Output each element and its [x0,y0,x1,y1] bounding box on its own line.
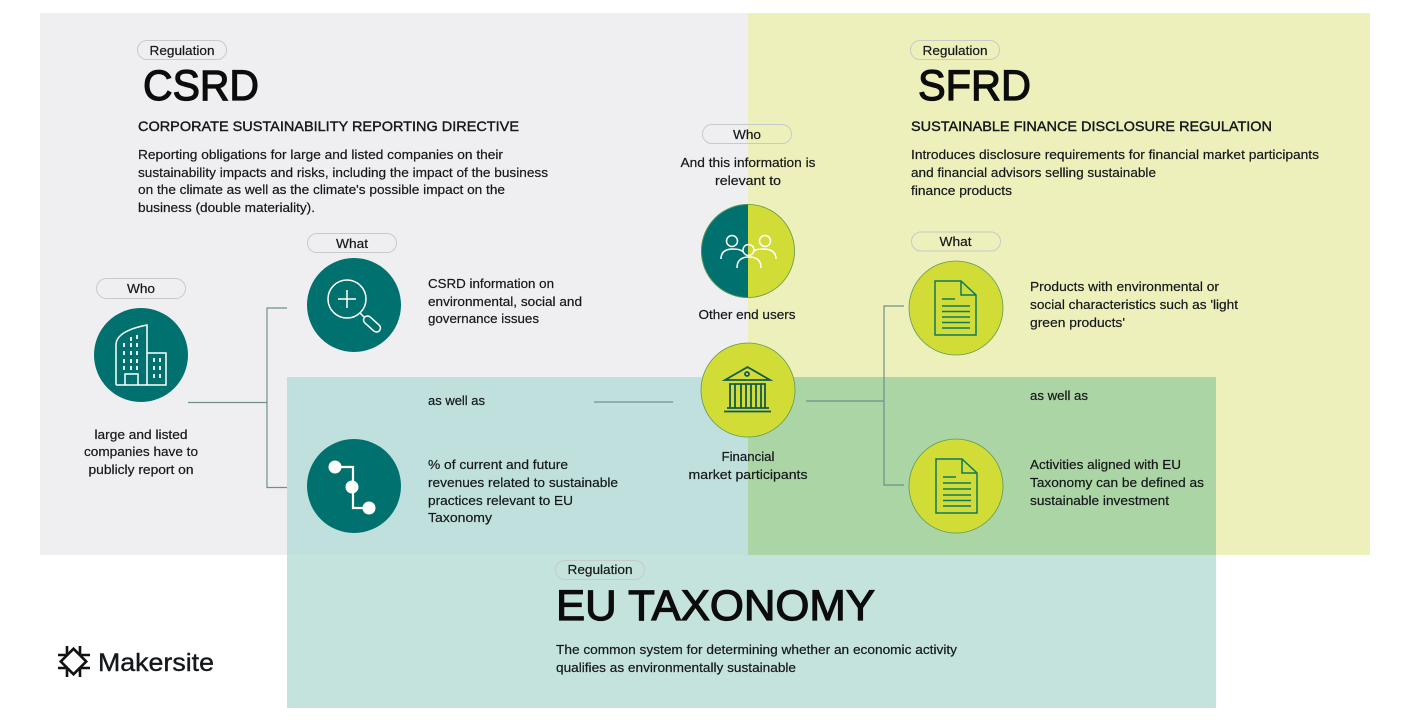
text: CSRD description: Reporting obligations for large and listed companies on their [138,147,504,162]
pill: Who [702,124,792,144]
pill: Regulation SFRD [910,40,1000,60]
pill: Regulation CSRD: Regulation [150,43,214,58]
pill: What [912,232,1000,251]
text: relevant to [680,155,816,188]
subheading: CSRD full name: CORPORATE SUSTAINABILITY REPORTING DIRECTIVE [138,118,519,134]
pill: Regulation SFRD: Regulation [922,43,988,58]
text: SFRD description: finance products [911,183,1013,198]
pill: What [308,234,396,252]
text: financial market participants: market participants [688,467,808,482]
group: SFRD what [909,232,1238,533]
text: activities aligned [1030,457,1205,508]
text: activities aligned: Activities aligned with EU [1030,457,1181,472]
text: CSRD description: sustainability impacts and risks, including the impact of the business [138,165,549,180]
icon: Makersite mark [58,646,90,677]
text: large and listed companies: companies have to [84,444,198,459]
text: large and listed companies [84,427,198,477]
pill: What: What [336,236,368,251]
text: CSRD information: governance issues [428,311,540,326]
text: relevant to: And this information is [680,155,816,170]
text: EU Taxonomy description [556,642,958,675]
text: SFRD description: and financial advisors selling sustainable [911,165,1156,180]
heading: CSRD: CSRD [143,62,259,110]
text: activities aligned: Taxonomy can be defined as [1030,475,1205,490]
panel: SFRD heading block [910,40,1320,198]
group: CSRD what [307,234,618,533]
icon: magnifying glass [307,258,401,352]
text: products with characteristics: social characteristics such as 'light [1030,297,1238,312]
overlap: CSRD and EU Taxonomy [287,377,748,555]
icon: pathway nodes [307,439,401,533]
text: percentage of revenues [428,457,618,525]
text: large and listed companies: publicly report on [88,462,194,477]
text: other end users: Other end users [698,307,796,322]
connector: financial market participants to SFRD what [806,306,904,485]
group: centre who [680,124,816,482]
text: CSRD information: environmental, social and [428,294,582,309]
text: large and listed companies: large and listed [94,427,188,442]
text: products with characteristics: Products with environmental or [1030,279,1220,294]
pill: Who [96,278,186,298]
text: CSRD information: CSRD information on [428,276,554,291]
text: as well as (SFRD): as well as [1030,388,1089,403]
text: products with characteristics [1030,279,1238,330]
panel: SFRD background [748,13,1370,555]
pill: Who: Who [733,127,761,142]
pill: Regulation EU Taxonomy: Regulation [568,562,632,577]
panel: CSRD heading block [138,40,549,215]
subheading: SFRD full name: SUSTAINABLE FINANCE DISCLOSURE REGULATION [911,118,1272,134]
group: CSRD who [84,278,198,477]
text: SFRD description: Introduces disclosure requirements for financial market participants [911,147,1320,162]
text: products with characteristics: green products' [1030,315,1125,330]
icon: other end users [701,204,795,298]
overlap: SFRD and EU Taxonomy [748,377,1216,555]
text: SFRD description [911,147,1320,198]
text: percentage of revenues: practices relevant to EU [428,493,573,508]
connector: CSRD who to what [188,308,287,488]
icon: document [909,439,1003,533]
panel: EU Taxonomy background [287,377,1216,708]
heading: SFRD: SFRD [918,62,1031,110]
text: CSRD description [138,147,549,215]
pill: Regulation CSRD [138,40,226,60]
text: financial market participants: Financial [722,449,775,464]
connector: as well as to financial market participants [594,401,673,403]
logo: Makersite [58,646,214,677]
panel: EU Taxonomy heading block [556,560,958,675]
panel: CSRD background [40,13,748,555]
text: CSRD information [428,276,582,326]
icon: document [909,261,1003,355]
text: percentage of revenues: Taxonomy [428,510,493,525]
text: CSRD description: business (double materiality). [138,200,315,215]
text: relevant to: relevant to [715,173,781,188]
icon: office buildings [94,308,188,402]
text: EU Taxonomy description: qualifies as environmentally sustainable [556,660,796,675]
pill: What: What [940,234,972,249]
pill: Who: Who [127,281,155,296]
text: as well as (CSRD): as well as [428,393,485,408]
text: percentage of revenues: % of current and future [428,457,568,472]
text: CSRD description: on the climate as well as the climate's possible impact on the [138,182,505,197]
icon: bank building [701,343,795,437]
text: Makersite wordmark: Makersite [98,649,214,677]
heading: EU Taxonomy: EU TAXONOMY [556,582,875,630]
text: percentage of revenues: revenues related to sustainable [428,475,618,490]
text: EU Taxonomy description: The common system for determining whether an economic activity [556,642,958,657]
text: activities aligned: sustainable investment [1030,493,1169,508]
text: financial market participants [688,449,808,482]
pill: Regulation EU Taxonomy [556,560,644,580]
